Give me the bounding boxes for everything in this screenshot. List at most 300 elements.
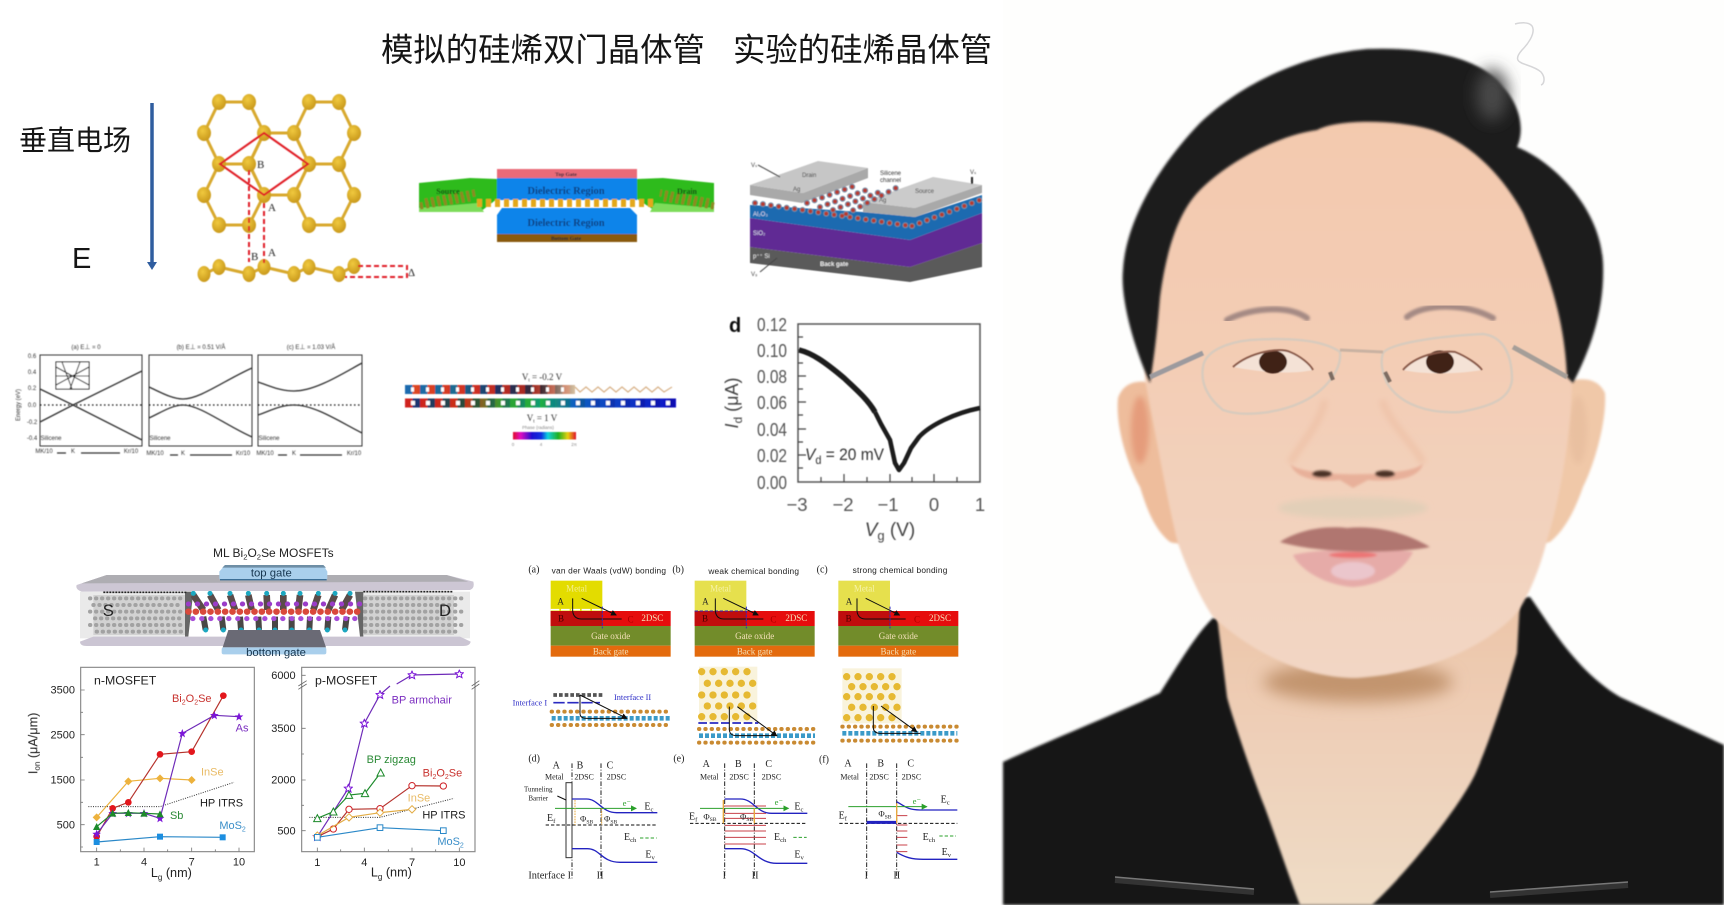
top plate lower edge bbox=[76, 575, 474, 592]
k-axis arrows bbox=[57, 453, 342, 455]
x axis title: (nm) bbox=[382, 865, 412, 879]
left ear bbox=[1118, 382, 1200, 543]
series labels: InSe bbox=[408, 793, 430, 805]
atom labels: A bbox=[268, 202, 276, 214]
stack (c): B bbox=[846, 613, 852, 623]
series labels: 2 bbox=[460, 843, 464, 850]
band panel frames bbox=[40, 355, 362, 446]
diagram: silicene lattice top and side view bbox=[197, 94, 415, 282]
purple and red core bbox=[188, 604, 362, 619]
source contact bbox=[419, 178, 497, 212]
y tick labels: 3500 bbox=[51, 685, 75, 697]
top dielectric bbox=[497, 178, 637, 200]
band diagram (d): e⁻ bbox=[623, 798, 632, 808]
panel: metal-2DSC contact bonding schematics bbox=[513, 565, 958, 881]
title: experimental silicene transistor: 实验的硅烯晶体管 bbox=[733, 32, 992, 68]
stack (a): Gate oxide bbox=[591, 631, 630, 641]
device heading: O bbox=[247, 546, 257, 560]
diagram: phase colour map of silicene channel bbox=[405, 372, 676, 447]
stack (a): C bbox=[628, 615, 634, 625]
x axis title: g bbox=[158, 873, 162, 882]
band diagram (d): Φ bbox=[580, 814, 586, 824]
band diagram (d): v bbox=[651, 854, 655, 861]
column headings: (c) bbox=[817, 565, 828, 576]
plot frame bbox=[798, 324, 980, 482]
band diagram (f): v bbox=[948, 852, 952, 859]
band diagram (e): 2DSC bbox=[762, 773, 781, 782]
x tick labels: −3 bbox=[786, 494, 808, 515]
colour bar labels: 2π bbox=[571, 442, 577, 447]
stack labels: Silicene bbox=[880, 171, 902, 177]
series labels: HP ITRS bbox=[200, 797, 243, 809]
band curves bbox=[40, 363, 362, 440]
band diagram (f): Metal bbox=[840, 773, 860, 782]
stubble shade bbox=[1278, 497, 1428, 519]
x axis title: g bbox=[378, 872, 382, 881]
chart: silicene band structures under electric field bbox=[16, 344, 362, 457]
device heading: Se MOSFETs bbox=[261, 546, 334, 560]
right ear bbox=[1530, 379, 1605, 543]
band diagram (e): E bbox=[794, 801, 800, 812]
stack (c): C bbox=[914, 615, 920, 625]
band diagram (e): A bbox=[703, 759, 711, 770]
band chart text: Silicene bbox=[258, 436, 280, 442]
device heading: ML Bi bbox=[213, 546, 243, 560]
band chart text: Silicene bbox=[40, 436, 62, 442]
channel upper sticks bbox=[193, 595, 350, 610]
drain block bbox=[363, 592, 470, 638]
band diagram (d): (d) bbox=[528, 754, 540, 765]
diagram: experimental silicene FET 3D stack bbox=[750, 161, 982, 282]
y axis title: I bbox=[722, 424, 742, 429]
device heading: 2 bbox=[243, 552, 247, 561]
As series bbox=[97, 715, 239, 834]
MoS2 series bbox=[97, 837, 223, 842]
x tick labels bbox=[94, 856, 245, 868]
band diagram (e): Metal bbox=[700, 773, 719, 782]
x tick labels: 4 bbox=[141, 856, 147, 868]
mouth bbox=[1280, 527, 1430, 587]
y axis title: I bbox=[26, 771, 40, 774]
colour bar labels: 0 bbox=[512, 442, 515, 447]
series labels: MoS bbox=[437, 836, 460, 848]
contact atoms bbox=[90, 598, 463, 632]
band diagram (d): Φ bbox=[604, 814, 610, 824]
y tick labels: 0.06 bbox=[757, 392, 787, 413]
band diagram (d): Metal bbox=[545, 773, 564, 782]
stack (c): Gate oxide bbox=[879, 631, 918, 641]
band diagram (d): SB bbox=[610, 819, 617, 825]
x tick labels: 1 bbox=[975, 494, 985, 515]
y tick labels: 0.04 bbox=[757, 419, 787, 440]
cyan atoms bbox=[193, 593, 350, 630]
band diagram (f): E bbox=[941, 795, 947, 806]
band diagram (d): ch bbox=[630, 837, 637, 844]
stack (b): Gate oxide bbox=[735, 631, 774, 641]
silicene atoms bbox=[755, 185, 980, 226]
gate voltage labels: t bbox=[533, 420, 535, 424]
silicene channel bbox=[420, 193, 714, 206]
y tick labels: 1500 bbox=[51, 775, 75, 787]
stack labels: p⁺⁺ Si bbox=[753, 253, 770, 260]
y tick labels: 3500 bbox=[271, 723, 296, 735]
band diagram (e): II bbox=[752, 870, 759, 881]
colour bar labels bbox=[512, 425, 577, 447]
y tick labels: 0.08 bbox=[757, 366, 787, 387]
stack (c) bbox=[838, 581, 958, 657]
band diagram (e) bbox=[673, 754, 807, 881]
gate voltage labels bbox=[522, 372, 563, 424]
source lead bbox=[971, 177, 973, 184]
band chart text: MK/10 bbox=[256, 451, 274, 457]
stack (b): B bbox=[702, 613, 708, 623]
series labels: Sb bbox=[170, 810, 183, 822]
chart: n-MOSFET bbox=[26, 667, 254, 882]
band diagram (f): Φ bbox=[878, 809, 885, 819]
stack (c): 2DSC bbox=[929, 613, 951, 623]
jacket bbox=[1003, 597, 1724, 905]
jacket zip details bbox=[1115, 877, 1628, 895]
band diagram (f) bbox=[819, 755, 957, 881]
stack labels: Ag bbox=[793, 187, 800, 193]
band diagram (f): f bbox=[845, 815, 848, 822]
stack (a): B bbox=[558, 613, 564, 623]
stack labels: Drain bbox=[802, 173, 816, 179]
band chart text: MK/10 bbox=[146, 451, 164, 457]
SiO2 layer bbox=[750, 213, 982, 267]
series labels: Bi bbox=[172, 693, 182, 705]
atomic structure (a) bbox=[513, 693, 672, 725]
y tick labels: 500 bbox=[277, 825, 296, 837]
band diagram (e): Φ bbox=[703, 811, 710, 821]
x axis title: L bbox=[371, 865, 378, 879]
label: vertical electric field: 垂直电场 bbox=[19, 125, 131, 156]
y axis title: d bbox=[731, 417, 745, 424]
band diagram (d): A bbox=[553, 760, 561, 771]
stack (c): Back gate bbox=[880, 646, 916, 656]
series labels: InSe bbox=[201, 767, 224, 779]
stack (c): Metal bbox=[854, 584, 875, 594]
Id curve bbox=[799, 350, 875, 412]
stack labels: Ag bbox=[879, 198, 886, 204]
y tick labels: 500 bbox=[57, 819, 75, 831]
device labels: Top Gate bbox=[555, 172, 577, 178]
band chart text: Kr/10 bbox=[124, 449, 139, 455]
bottom dielectric bbox=[497, 208, 637, 234]
bottom gate bbox=[497, 234, 637, 242]
atomic structure (a): Interface II bbox=[614, 693, 651, 702]
band chart text: 0.2 bbox=[28, 386, 37, 392]
band diagram (f): (f) bbox=[819, 755, 829, 766]
band diagram (d): C bbox=[607, 760, 614, 771]
band chart text: MK/10 bbox=[35, 449, 53, 455]
band diagram (f): B bbox=[877, 759, 884, 770]
channel side shading bbox=[185, 592, 363, 637]
upper atom row bbox=[405, 387, 672, 392]
atomic structure (a): Interface I bbox=[513, 698, 547, 707]
stack labels: Al₂O₃ bbox=[753, 212, 768, 218]
top plate edge bbox=[103, 589, 453, 595]
series labels: 2 bbox=[194, 700, 198, 707]
device labels: Source bbox=[436, 187, 460, 196]
chin shadow bbox=[1263, 662, 1453, 702]
ticks bbox=[81, 690, 239, 852]
band chart text: Kr/10 bbox=[347, 451, 362, 457]
inset band plot bbox=[56, 362, 89, 389]
stack labels: Back gate bbox=[820, 262, 849, 268]
stack labels: V₉ bbox=[751, 272, 758, 278]
x axis title: (V) bbox=[885, 520, 915, 541]
HP ITRS trend bbox=[88, 782, 234, 807]
source and drain letters: D bbox=[439, 601, 451, 620]
x tick labels: −2 bbox=[832, 494, 854, 515]
band diagram (f): II bbox=[893, 870, 901, 881]
frame bbox=[81, 667, 254, 852]
ticks bbox=[302, 675, 459, 852]
annotation Vd: = 20 mV bbox=[821, 445, 885, 464]
photo background bbox=[1003, 0, 1724, 905]
column headings: strong chemical bonding bbox=[853, 565, 948, 575]
band diagram (e): E bbox=[689, 811, 695, 822]
x tick labels bbox=[786, 494, 985, 515]
band chart text: Energy (eV) bbox=[16, 389, 22, 421]
band chart text: (c) E⊥ = 1.03 V/Å bbox=[287, 344, 335, 351]
Bi2O2Se series bbox=[317, 786, 443, 837]
stack labels: channel bbox=[880, 178, 901, 184]
band diagram (e): 2DSC bbox=[729, 773, 749, 782]
stack (a): 2DSC bbox=[641, 613, 663, 623]
x tick labels: 10 bbox=[233, 856, 245, 868]
band diagram (e): e⁻ bbox=[775, 797, 784, 807]
gate labels bbox=[246, 567, 306, 659]
band diagram (e): ch bbox=[780, 837, 787, 844]
band diagram (f): 2DSC bbox=[902, 773, 921, 782]
Sb series bbox=[97, 813, 160, 827]
source lower light band bbox=[419, 203, 484, 212]
band diagram (f): A bbox=[844, 759, 852, 770]
drain top face bbox=[750, 161, 868, 193]
InSe series bbox=[97, 778, 192, 817]
device labels: Bottom Gate bbox=[551, 236, 582, 242]
frame bbox=[302, 667, 475, 852]
Id curve dip bbox=[875, 408, 980, 470]
y tick labels bbox=[757, 314, 787, 493]
x axis title: V bbox=[865, 520, 880, 541]
band diagram (e): SB bbox=[746, 817, 753, 823]
device labels: Dielectric Region bbox=[527, 218, 605, 229]
chart: Id vs Vg transfer curve bbox=[722, 314, 985, 543]
x tick labels: 7 bbox=[409, 857, 415, 869]
atom labels: B bbox=[251, 251, 258, 263]
source electrode side bbox=[863, 185, 982, 217]
series labels: 2 bbox=[432, 774, 436, 781]
band diagram (d): II bbox=[597, 870, 604, 881]
portrait photo bbox=[1003, 0, 1724, 905]
right ear inner shade bbox=[1569, 396, 1587, 464]
stack labels: Source bbox=[915, 189, 935, 195]
Al2O3 layer bbox=[750, 195, 982, 240]
x axis title: g bbox=[877, 528, 885, 543]
band diagram (d): SB bbox=[586, 819, 593, 825]
title: simulated silicene double-gate transistor: 模拟的硅烯双门晶体管 bbox=[381, 32, 705, 68]
drain inner shade bbox=[364, 595, 454, 635]
x tick labels: −1 bbox=[877, 494, 899, 515]
top gate cap bbox=[222, 565, 326, 568]
top plate face bbox=[82, 575, 468, 583]
drain contact bbox=[637, 178, 714, 212]
channel background bbox=[185, 592, 363, 637]
band chart text: (b) E⊥ = 0.51 V/Å bbox=[177, 344, 225, 351]
stack (a): Back gate bbox=[593, 646, 629, 656]
hair bbox=[1123, 49, 1603, 383]
panel letter d: d bbox=[729, 315, 741, 337]
x tick labels: 10 bbox=[453, 857, 465, 869]
band diagram (d): 2DSC bbox=[607, 773, 626, 782]
band diagram (f): C bbox=[907, 759, 914, 770]
stack labels: Vₛ bbox=[970, 170, 976, 176]
band diagram (d): Barrier bbox=[528, 794, 549, 802]
stack (b): 2DSC bbox=[785, 613, 807, 623]
band diagram (e): E bbox=[774, 832, 780, 843]
band diagram (e): f bbox=[695, 816, 698, 823]
chart title: p-MOSFET bbox=[315, 674, 378, 688]
diagram: double-gate device bbox=[419, 169, 714, 242]
silicene atoms shadow bbox=[755, 185, 980, 226]
band diagram (d): B bbox=[577, 760, 584, 771]
device heading: 2 bbox=[257, 552, 261, 561]
gate voltage labels: = -0.2 V bbox=[530, 372, 563, 382]
chart: p-MOSFET bbox=[271, 667, 479, 881]
stack (c): A bbox=[846, 597, 853, 607]
y tick labels bbox=[271, 670, 296, 837]
atom labels bbox=[251, 159, 415, 279]
stack (a): Metal bbox=[566, 584, 588, 594]
bottom gate base bbox=[222, 647, 326, 654]
series labels: MoS bbox=[219, 820, 242, 832]
source top face bbox=[863, 177, 982, 208]
stack (b): C bbox=[770, 615, 776, 625]
axis break marks bbox=[298, 681, 479, 689]
atom labels: B bbox=[257, 159, 264, 171]
y tick labels: 0.12 bbox=[757, 314, 787, 335]
column headings: van der Waals (vdW) bonding bbox=[552, 566, 666, 576]
pen mark on photo bbox=[1515, 23, 1544, 85]
band chart text: 0.4 bbox=[28, 370, 37, 376]
Fermi level dotted lines bbox=[40, 404, 362, 406]
band chart text: Kr/10 bbox=[236, 451, 251, 457]
band diagram (f): ch bbox=[929, 837, 936, 844]
band diagram (d): E bbox=[624, 832, 630, 843]
top gate bbox=[497, 169, 637, 178]
y tick labels: 0.10 bbox=[757, 340, 787, 361]
band diagram (f): E bbox=[839, 810, 845, 821]
Bi2O2Se series bbox=[97, 696, 223, 837]
stack (b): A bbox=[702, 597, 709, 607]
band diagram (e): C bbox=[765, 759, 772, 770]
band diagram (e): I bbox=[723, 870, 727, 881]
left ear inner shade bbox=[1131, 396, 1149, 464]
BP armchair series lower bbox=[317, 686, 390, 837]
band diagram (d): f bbox=[553, 818, 556, 825]
gate voltage labels: t bbox=[528, 378, 530, 384]
label: E: E bbox=[72, 243, 91, 275]
x axis title: (nm) bbox=[162, 866, 192, 880]
stack (a) bbox=[551, 581, 671, 657]
series labels: BP zigzag bbox=[367, 754, 416, 766]
device labels: Dielectric Region bbox=[527, 186, 605, 197]
stack (b): Metal bbox=[710, 584, 732, 594]
top gate edge bbox=[220, 578, 327, 582]
band diagram (d): Tunneling bbox=[524, 786, 553, 794]
band chart text: Silicene bbox=[149, 436, 171, 442]
chart title: n-MOSFET bbox=[94, 673, 157, 687]
band diagram (f): e⁻ bbox=[913, 796, 922, 806]
band diagram (e): B bbox=[735, 759, 742, 770]
series labels: Se bbox=[449, 767, 462, 779]
band chart text bbox=[16, 344, 362, 457]
series labels: As bbox=[236, 723, 249, 735]
y tick labels: 2000 bbox=[271, 775, 296, 787]
series labels: BP armchair bbox=[392, 694, 452, 706]
glasses bbox=[1150, 334, 1567, 414]
nose base bbox=[1290, 463, 1423, 488]
MOSFET schematic bbox=[76, 565, 474, 659]
hair highlight bbox=[1476, 69, 1508, 121]
source and drain letters: S bbox=[103, 601, 114, 620]
stack (a): A bbox=[557, 597, 564, 607]
band diagram (d): E bbox=[547, 813, 553, 824]
band diagram (d) bbox=[524, 754, 657, 881]
band chart text: 0.0 bbox=[28, 403, 37, 409]
band diagram (d): c bbox=[650, 806, 653, 813]
band diagram (e): c bbox=[800, 806, 803, 813]
atomic structure (b) bbox=[698, 667, 815, 743]
band chart text: -0.2 bbox=[27, 420, 38, 426]
band diagram (f): 2DSC bbox=[869, 773, 889, 782]
band chart text: 0.6 bbox=[28, 354, 37, 360]
band diagram (e): SB bbox=[710, 817, 717, 823]
top gate bbox=[219, 565, 327, 580]
band diagram (e): (e) bbox=[673, 754, 684, 765]
column headings bbox=[528, 565, 948, 576]
x tick labels: 1 bbox=[314, 857, 320, 869]
panel: Bi2O2Se MOSFET device and performance charts bbox=[26, 546, 479, 882]
stack labels bbox=[751, 163, 976, 278]
band chart text: K bbox=[71, 449, 75, 455]
gate voltage labels: = 1 V bbox=[535, 413, 558, 423]
source and drain letters bbox=[103, 601, 451, 620]
y tick labels: 6000 bbox=[271, 670, 296, 682]
atom labels: Δ bbox=[408, 267, 415, 279]
x tick labels: 1 bbox=[94, 856, 100, 868]
y axis title: (μA/μm) bbox=[26, 713, 40, 762]
drain electrode side bbox=[750, 168, 868, 203]
band diagram (e): E bbox=[794, 849, 800, 860]
band diagram (f): I bbox=[865, 870, 869, 881]
bottom gate body bbox=[223, 630, 326, 647]
band diagram (d): Interface I bbox=[528, 870, 572, 881]
eyebrows bbox=[1227, 307, 1493, 320]
band diagram (d): 2DSC bbox=[574, 773, 594, 782]
y tick labels: 0.02 bbox=[757, 445, 787, 466]
gate voltage labels: V bbox=[522, 372, 528, 382]
gate labels: top gate bbox=[251, 567, 292, 579]
colour bar bbox=[513, 432, 576, 440]
neck and chest bbox=[1215, 600, 1520, 905]
lead lines bbox=[758, 165, 780, 272]
axis ticks bbox=[798, 337, 957, 482]
stack (b) bbox=[695, 581, 815, 657]
